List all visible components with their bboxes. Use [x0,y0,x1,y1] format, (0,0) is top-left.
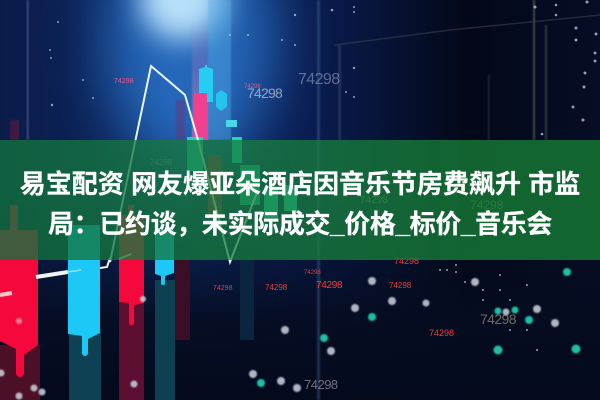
74298 number labels: 74298 [247,85,283,101]
74298 number labels: 74298 [244,84,261,90]
candle reflections [0,260,254,400]
pink candle top [194,93,208,140]
red candle left [0,205,38,377]
74298 number labels: 74298 [429,328,454,338]
74298 number labels: 74298 [394,256,419,266]
cyan candle right [155,230,174,285]
cyan candle [68,225,100,356]
title [20,169,580,239]
74298 number labels: 74298 [316,280,343,291]
74298 number labels: 74298 [389,281,412,290]
74298 number labels: 74298 [114,78,134,85]
candlesticks [0,65,297,377]
cyan lozenge candle [216,90,227,111]
teal dots [257,268,580,387]
74298 number labels: 74298 [470,198,504,212]
white polyline [0,66,258,295]
74298 number labels: 74298 [304,270,321,276]
74298 number labels: 74298 [360,195,388,206]
title: 局：已约谈，未实际成交_价格_标价_音乐会 [48,209,552,239]
blue glow [105,0,275,170]
74298 number labels: 74298 [298,71,340,88]
74298 number labels: 74298 [213,285,233,292]
74298 number labels: 74298 [150,158,173,167]
teal candles in band [187,137,203,171]
scattered dots [0,277,559,400]
faint diagonal trend line [335,15,600,45]
green title band [0,140,600,260]
74298 number labels: 74298 [265,283,288,292]
74298 number labels: 74298 [304,377,338,392]
title: 易宝配资 网友爆亚朵酒店因音乐节房费飙升 市监 [20,169,580,199]
red candle middle [119,205,144,326]
74298 number labels [114,71,517,392]
small cyan candle [226,120,237,127]
cyan candle top [199,65,213,102]
74298 number labels: 74298 [480,311,517,327]
